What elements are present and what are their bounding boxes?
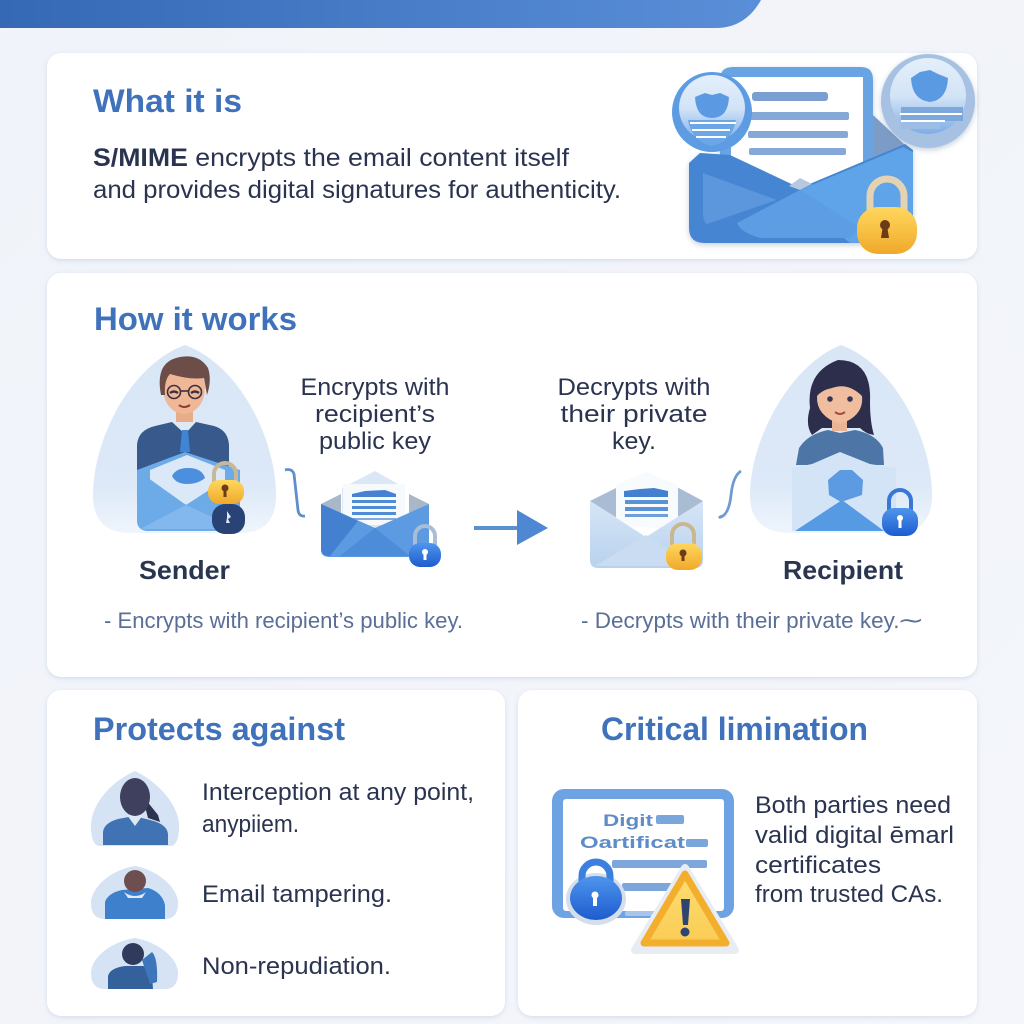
glasses bbox=[168, 386, 202, 398]
text: non-repudiation: Non-repudiation. bbox=[202, 953, 391, 980]
text: interception bbox=[202, 779, 474, 838]
panel: protects against bbox=[47, 690, 505, 1016]
icon: person, non-repudiation bbox=[91, 938, 178, 989]
icon: warning triangle bbox=[635, 868, 735, 950]
text: limitation bbox=[755, 792, 954, 908]
panel: critical limitation bbox=[518, 690, 977, 1016]
label: sender: Sender bbox=[139, 555, 230, 585]
icon: person, tampering bbox=[91, 866, 178, 919]
panel: how it works bbox=[47, 273, 977, 677]
lock: gold bbox=[208, 463, 244, 504]
lock: blue bbox=[882, 490, 918, 536]
caption: encrypts: Encrypts with bbox=[300, 374, 450, 401]
text: limitation: Both parties need bbox=[755, 792, 951, 819]
panel: what it is bbox=[47, 53, 977, 259]
lock: gold bbox=[666, 524, 702, 570]
heading: how it works: How it works bbox=[94, 301, 297, 337]
heading: critical limination: Critical limination bbox=[601, 711, 868, 747]
certificate text bbox=[580, 811, 708, 852]
text: limitation: valid digital ēmarl bbox=[755, 822, 954, 849]
arrow: encrypt to decrypt bbox=[474, 510, 548, 545]
text: description: S/MIME encrypts the email content itself bbox=[93, 144, 569, 172]
lock: blue bbox=[566, 862, 626, 925]
icon: person, interception bbox=[91, 771, 179, 846]
sender figure bbox=[93, 345, 276, 534]
icon: right seal bbox=[881, 54, 975, 148]
recipient figure bbox=[750, 345, 932, 536]
icon: gold padlock bbox=[857, 179, 917, 254]
icon: decrypted envelope bbox=[590, 472, 703, 570]
icon: digital certificate bbox=[552, 789, 735, 950]
text: limitation: from trusted CAs. bbox=[755, 881, 943, 908]
connector: sender to envelope bbox=[285, 470, 305, 516]
lock: navy bbox=[212, 504, 245, 534]
caption: encrypts: public key bbox=[319, 428, 431, 455]
caption: encrypts bbox=[300, 374, 450, 455]
icon: encrypted envelope bbox=[321, 471, 441, 567]
text: description bbox=[93, 144, 621, 204]
certificate text: Digit bbox=[603, 811, 653, 830]
label: recipient: Recipient bbox=[783, 555, 903, 585]
caption: decrypts bbox=[558, 374, 710, 455]
text: interception: anypiiem. bbox=[202, 811, 299, 838]
top banner bbox=[0, 0, 761, 28]
text: interception: Interception at any point, bbox=[202, 779, 474, 806]
caption: encrypts: recipient’s bbox=[315, 401, 435, 428]
recipient envelope bbox=[792, 452, 918, 536]
certificate text: Oartificat bbox=[580, 833, 685, 852]
text: description: and provides digital signatures for authenticity. bbox=[93, 176, 621, 204]
heading: protects against: Protects against bbox=[93, 711, 345, 747]
heading: what it is: What it is bbox=[93, 83, 242, 119]
caption: decrypts: key. bbox=[612, 428, 656, 455]
sender envelope bbox=[137, 452, 240, 531]
icon: large envelope with lock and seals bbox=[689, 67, 913, 243]
caption: decrypts: Decrypts with bbox=[558, 374, 710, 401]
caption: decrypts: their private bbox=[560, 401, 708, 428]
text: tampering: Email tampering. bbox=[202, 881, 392, 908]
icon: left seal bbox=[672, 72, 752, 152]
text: limitation: certificates bbox=[755, 852, 881, 879]
note: decrypts: - Decrypts with their private key.⁓ bbox=[581, 608, 922, 633]
connector: envelope to recipient bbox=[720, 471, 741, 517]
lock: blue bbox=[409, 526, 441, 567]
note: encrypts: - Encrypts with recipient’s public key. bbox=[104, 608, 463, 633]
